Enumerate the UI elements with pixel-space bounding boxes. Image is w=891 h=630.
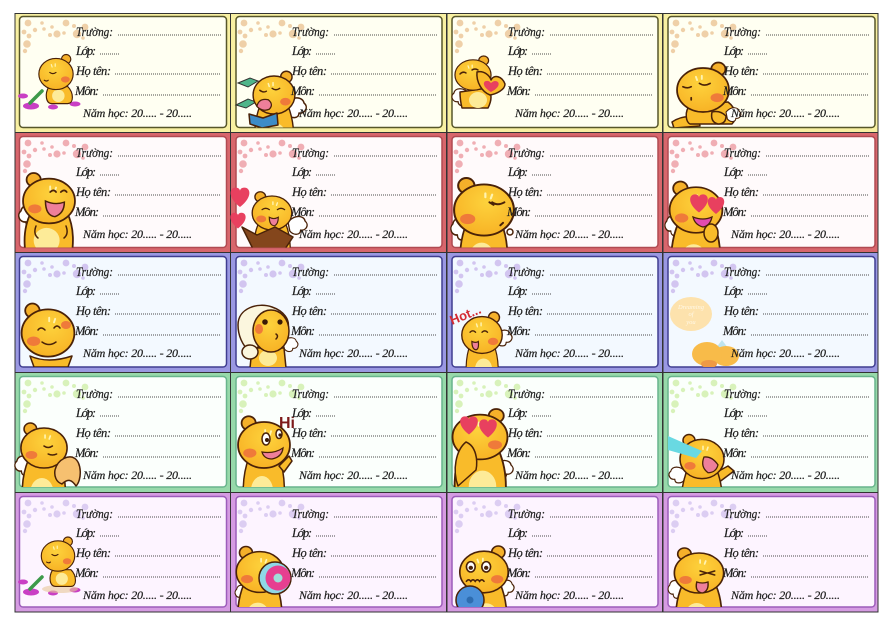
form fields: label 18: Môn: xyxy=(290,566,315,580)
form fields: label 18 xyxy=(290,507,438,602)
form fields: label 13: Họ tên: xyxy=(75,426,111,440)
form text: row 4 xyxy=(74,387,870,482)
form fields: label 3: Môn: xyxy=(506,84,531,98)
form fields: label 16: Môn: xyxy=(722,446,747,460)
form fields: label 13: Môn: xyxy=(74,446,99,460)
form fields: label 16: Năm học: 20..... - 20..... xyxy=(730,468,840,482)
form fields: label 12 xyxy=(722,265,870,360)
form fields: label 8 xyxy=(722,146,870,241)
label frame row 1 xyxy=(16,14,878,132)
form fields: label 18: Lớp: xyxy=(291,526,312,540)
form fields: label 15: Họ tên: xyxy=(507,426,543,440)
mascots row 3 xyxy=(20,297,739,367)
form fields: label 14: Lớp: xyxy=(291,406,312,420)
form fields: label 6: Trường: xyxy=(292,146,329,160)
form fields: label 12: Môn: xyxy=(722,324,747,338)
form fields: label 7: Môn: xyxy=(506,205,531,219)
form fields: label 4: Môn: xyxy=(722,84,747,98)
form fields: label 20: Môn: xyxy=(722,566,747,580)
form fields: label 11: Năm học: 20..... - 20..... xyxy=(514,346,624,360)
dot decorations row 3 xyxy=(22,260,736,293)
form fields: label 8: Họ tên: xyxy=(723,185,759,199)
mascot: guitar and hearts xyxy=(230,188,308,248)
form fields: label 17: Lớp: xyxy=(75,526,96,540)
form fields: label 1: Họ tên: xyxy=(75,64,111,78)
form fields: label 2: Môn: xyxy=(290,84,315,98)
form fields: label 2: Họ tên: xyxy=(291,64,327,78)
mascot: hugging puppy xyxy=(14,422,81,487)
form fields: label 9: Môn: xyxy=(74,324,99,338)
mascot: crying xyxy=(668,434,735,487)
form fields: label 20 xyxy=(722,507,870,602)
form fields: label 9: Lớp: xyxy=(75,284,96,298)
mascots row 5 xyxy=(18,536,724,607)
form fields: label 4: Lớp: xyxy=(723,44,744,58)
form fields: label 5: Môn: xyxy=(74,205,99,219)
mascot: sulking xyxy=(672,62,741,128)
inner panels row 1 xyxy=(20,16,875,128)
form text: row 3 xyxy=(74,265,870,360)
form fields: label 19: Môn: xyxy=(506,566,531,580)
form fields: label 6: Họ tên: xyxy=(291,185,327,199)
form fields: label 13: Trường: xyxy=(76,387,113,401)
form fields: label 4: Năm học: 20..... - 20..... xyxy=(730,106,840,120)
inner panels row 5 xyxy=(20,496,875,607)
form fields: label 13: Lớp: xyxy=(75,406,96,420)
form fields: label 17: Họ tên: xyxy=(75,546,111,560)
form fields: label 2: Năm học: 20..... - 20..... xyxy=(298,106,408,120)
form fields: label 5: Lớp: xyxy=(75,165,96,179)
form fields: label 9: Họ tên: xyxy=(75,304,111,318)
inner panels row 4 xyxy=(20,376,875,487)
mascot: watering flowers xyxy=(18,54,80,110)
form fields: label 15: Lớp: xyxy=(507,406,528,420)
mascot: in love xyxy=(452,408,514,487)
form fields: label 16: Họ tên: xyxy=(723,426,759,440)
form fields: label 19: Trường: xyxy=(508,507,545,521)
form fields: label 9: Trường: xyxy=(76,265,113,279)
form fields: label 13 xyxy=(74,387,222,482)
form fields: label 1 xyxy=(74,25,222,120)
form fields: label 19 xyxy=(506,507,654,602)
mascot: hot, tongue out xyxy=(450,310,513,367)
form fields: label 17: Môn: xyxy=(74,566,99,580)
form fields: label 11: Môn: xyxy=(506,324,531,338)
mascot: hot, tongue out: Hot... xyxy=(448,302,483,328)
mascot: dreaming: of xyxy=(688,311,695,318)
form fields: label 6 xyxy=(290,146,438,241)
form fields: label 12: Họ tên: xyxy=(723,304,759,318)
form fields: label 4: Họ tên: xyxy=(723,64,759,78)
mascot: watering flowers xyxy=(18,537,80,596)
form fields: label 6: Lớp: xyxy=(291,165,312,179)
mascots row 1 xyxy=(18,54,742,128)
form fields: label 11: Họ tên: xyxy=(507,304,543,318)
form text: row 1 xyxy=(74,25,870,120)
form fields: label 18: Trường: xyxy=(292,507,329,521)
form fields: label 20: Trường: xyxy=(724,507,761,521)
form fields: label 15: Trường: xyxy=(508,387,545,401)
form fields: label 18: Họ tên: xyxy=(291,546,327,560)
form fields: label 17: Năm học: 20..... - 20..... xyxy=(82,588,192,602)
mascot: white hood xyxy=(238,305,298,368)
form fields: label 5: Họ tên: xyxy=(75,185,111,199)
form fields: label 3 xyxy=(506,25,654,120)
dot decorations row 5 xyxy=(22,500,736,533)
form fields: label 2: Lớp: xyxy=(291,44,312,58)
form fields: label 17 xyxy=(74,507,222,602)
label frame row 4 xyxy=(16,373,878,492)
mascot: heart hands xyxy=(452,56,505,108)
form fields: label 3: Năm học: 20..... - 20..... xyxy=(514,106,624,120)
form fields: label 16 xyxy=(722,387,870,482)
form fields: label 2: Trường: xyxy=(292,25,329,39)
form fields: label 8: Trường: xyxy=(724,146,761,160)
form fields: label 10: Năm học: 20..... - 20..... xyxy=(298,346,408,360)
form fields: label 20: Họ tên: xyxy=(723,546,759,560)
mascot: blushing xyxy=(450,177,515,248)
form fields: label 20: Lớp: xyxy=(723,526,744,540)
dot decorations row 1 xyxy=(22,20,736,53)
form fields: label 17: Trường: xyxy=(76,507,113,521)
form fields: label 11: Trường: xyxy=(508,265,545,279)
form fields: label 5 xyxy=(74,146,222,241)
form fields: label 1: Trường: xyxy=(76,25,113,39)
form fields: label 14 xyxy=(290,387,438,482)
mascot: Hi: Hi xyxy=(279,415,295,432)
form fields: label 19: Năm học: 20..... - 20..... xyxy=(514,588,624,602)
mascot: worried with blue donut xyxy=(455,545,515,607)
form fields: label 6: Năm học: 20..... - 20..... xyxy=(298,227,408,241)
form fields: label 11: Lớp: xyxy=(507,284,528,298)
form fields: label 7: Trường: xyxy=(508,146,545,160)
mascot: donut xyxy=(234,546,292,607)
form fields: label 16: Lớp: xyxy=(723,406,744,420)
form fields: label 16: Trường: xyxy=(724,387,761,401)
form fields: label 5: Trường: xyxy=(76,146,113,160)
mascot: candy and book xyxy=(234,70,307,128)
mascot: tongue out xyxy=(668,547,724,607)
form fields: label 12: Trường: xyxy=(724,265,761,279)
form fields: label 10: Họ tên: xyxy=(291,304,327,318)
form fields: label 7: Năm học: 20..... - 20..... xyxy=(514,227,624,241)
form fields: label 11 xyxy=(506,265,654,360)
mascots row 4 xyxy=(14,408,735,487)
form fields: label 3: Lớp: xyxy=(507,44,528,58)
form fields: label 7: Lớp: xyxy=(507,165,528,179)
form fields: label 19: Họ tên: xyxy=(507,546,543,560)
form fields: label 14: Trường: xyxy=(292,387,329,401)
form fields: label 8: Năm học: 20..... - 20..... xyxy=(730,227,840,241)
form text: row 5 xyxy=(74,507,870,602)
form fields: label 1: Môn: xyxy=(74,84,99,98)
form fields: label 7: Họ tên: xyxy=(507,185,543,199)
form fields: label 20: Năm học: 20..... - 20..... xyxy=(730,588,840,602)
form fields: label 4 xyxy=(722,25,870,120)
form fields: label 13: Năm học: 20..... - 20..... xyxy=(82,468,192,482)
dot decorations row 2 xyxy=(22,140,736,173)
mascot: dreaming: you xyxy=(685,319,696,326)
form fields: label 8: Lớp: xyxy=(723,165,744,179)
form fields: label 1: Năm học: 20..... - 20..... xyxy=(82,106,192,120)
form fields: label 10: Lớp: xyxy=(291,284,312,298)
form fields: label 3: Trường: xyxy=(508,25,545,39)
form fields: label 5: Năm học: 20..... - 20..... xyxy=(82,227,192,241)
form fields: label 8: Môn: xyxy=(722,205,747,219)
form fields: label 10: Môn: xyxy=(290,324,315,338)
mascot: dreaming xyxy=(670,297,739,368)
form fields: label 9 xyxy=(74,265,222,360)
mascot: dreaming: Dreaming xyxy=(677,304,705,311)
dot decorations row 4 xyxy=(22,380,736,413)
form fields: label 15: Năm học: 20..... - 20..... xyxy=(514,468,624,482)
form fields: label 10: Trường: xyxy=(292,265,329,279)
mascot: laughing xyxy=(18,172,76,248)
form fields: label 12: Năm học: 20..... - 20..... xyxy=(730,346,840,360)
form fields: label 2 xyxy=(290,25,438,120)
label frame row 2 xyxy=(16,133,878,252)
form fields: label 18: Năm học: 20..... - 20..... xyxy=(298,588,408,602)
label frame row 3 xyxy=(16,253,878,372)
form fields: label 1: Lớp: xyxy=(75,44,96,58)
form fields: label 6: Môn: xyxy=(290,205,315,219)
form text: row 2 xyxy=(74,146,870,241)
form fields: label 7 xyxy=(506,146,654,241)
inner panels row 2 xyxy=(20,136,875,248)
label frame row 5 xyxy=(16,493,878,612)
form fields: label 10 xyxy=(290,265,438,360)
mascot: smiling xyxy=(22,304,74,367)
form fields: label 14: Năm học: 20..... - 20..... xyxy=(298,468,408,482)
mascots row 2 xyxy=(18,172,724,248)
form fields: label 12: Lớp: xyxy=(723,284,744,298)
form fields: label 3: Họ tên: xyxy=(507,64,543,78)
mascot: Hi xyxy=(237,415,294,487)
mascot: heart eyes xyxy=(664,180,724,248)
form fields: label 19: Lớp: xyxy=(507,526,528,540)
form fields: label 14: Môn: xyxy=(290,446,315,460)
form fields: label 4: Trường: xyxy=(724,25,761,39)
inner panels row 3 xyxy=(20,256,875,367)
form fields: label 9: Năm học: 20..... - 20..... xyxy=(82,346,192,360)
form fields: label 15: Môn: xyxy=(506,446,531,460)
form fields: label 14: Họ tên: xyxy=(291,426,327,440)
form fields: label 15 xyxy=(506,387,654,482)
